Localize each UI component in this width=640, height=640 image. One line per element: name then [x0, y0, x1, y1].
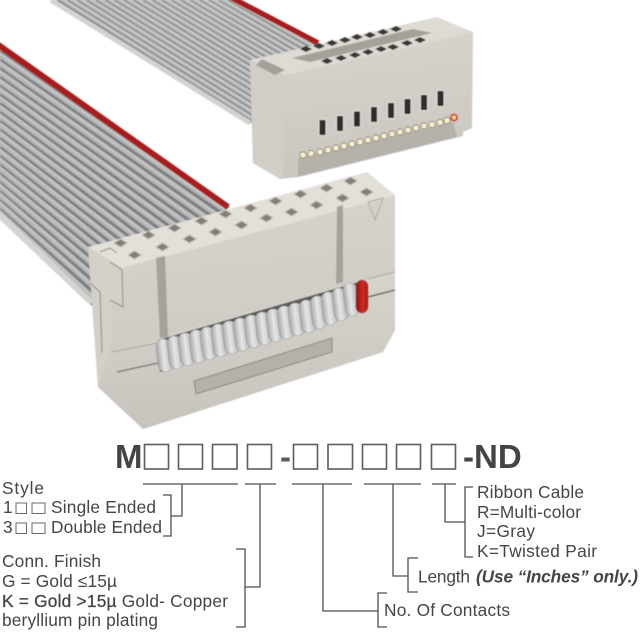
legend: connector finish: beryllium pin plating	[2, 610, 158, 630]
back connector windows	[319, 90, 444, 136]
legend: length: Length	[418, 566, 470, 586]
front connector edge details	[90, 248, 395, 372]
legend: style: Single Ended	[51, 497, 156, 517]
legend: ribbon cable: K=Twisted Pair	[477, 541, 597, 561]
legend: connector finish: Conn. Finish	[2, 551, 101, 571]
part number: M	[115, 438, 142, 475]
legend: connector finish: G = Gold ≤15µ	[2, 571, 117, 591]
legend: ribbon cable: R=Multi-color	[477, 502, 581, 522]
legend: ribbon cable: J=Gray	[477, 521, 535, 541]
polarity triangle mark	[368, 198, 383, 220]
leader lines	[143, 484, 473, 627]
legend: connector finish	[2, 551, 228, 630]
back connector body	[250, 32, 473, 179]
legend: length: (Use “Inches” only.)	[476, 566, 638, 586]
front connector grooves	[156, 205, 343, 338]
front connector	[88, 172, 395, 429]
front connector contact holes	[114, 177, 373, 259]
ribbon coil	[155, 280, 368, 373]
back connector pins	[300, 114, 457, 158]
legend: style: Double Ended	[51, 517, 162, 537]
front ribbon cable	[0, 43, 230, 306]
part number boxes	[144, 444, 456, 469]
part number: -ND	[463, 438, 522, 475]
legend: style: 3	[3, 517, 13, 537]
legend: style: Style	[2, 478, 44, 498]
back connector contact holes	[300, 26, 426, 64]
legend: connector finish: K = Gold >15µ Gold- Copper	[2, 591, 228, 611]
legend: ribbon cable: Ribbon Cable	[477, 482, 584, 502]
legend: style: 1	[3, 497, 13, 517]
part number: -	[280, 438, 291, 475]
back connector	[250, 17, 473, 179]
back connector lower band	[298, 122, 457, 177]
legend: number of contacts: No. Of Contacts	[384, 600, 510, 620]
back ribbon cable	[50, 0, 318, 124]
label window	[194, 338, 332, 394]
slot behind coil	[158, 281, 366, 372]
front connector body	[88, 195, 395, 429]
front connector top face	[88, 172, 395, 268]
part number	[115, 438, 522, 475]
legend: style	[2, 478, 162, 537]
back connector notch and slot	[256, 29, 432, 75]
legend: ribbon cable	[477, 482, 597, 561]
front connector lower section	[98, 272, 395, 429]
